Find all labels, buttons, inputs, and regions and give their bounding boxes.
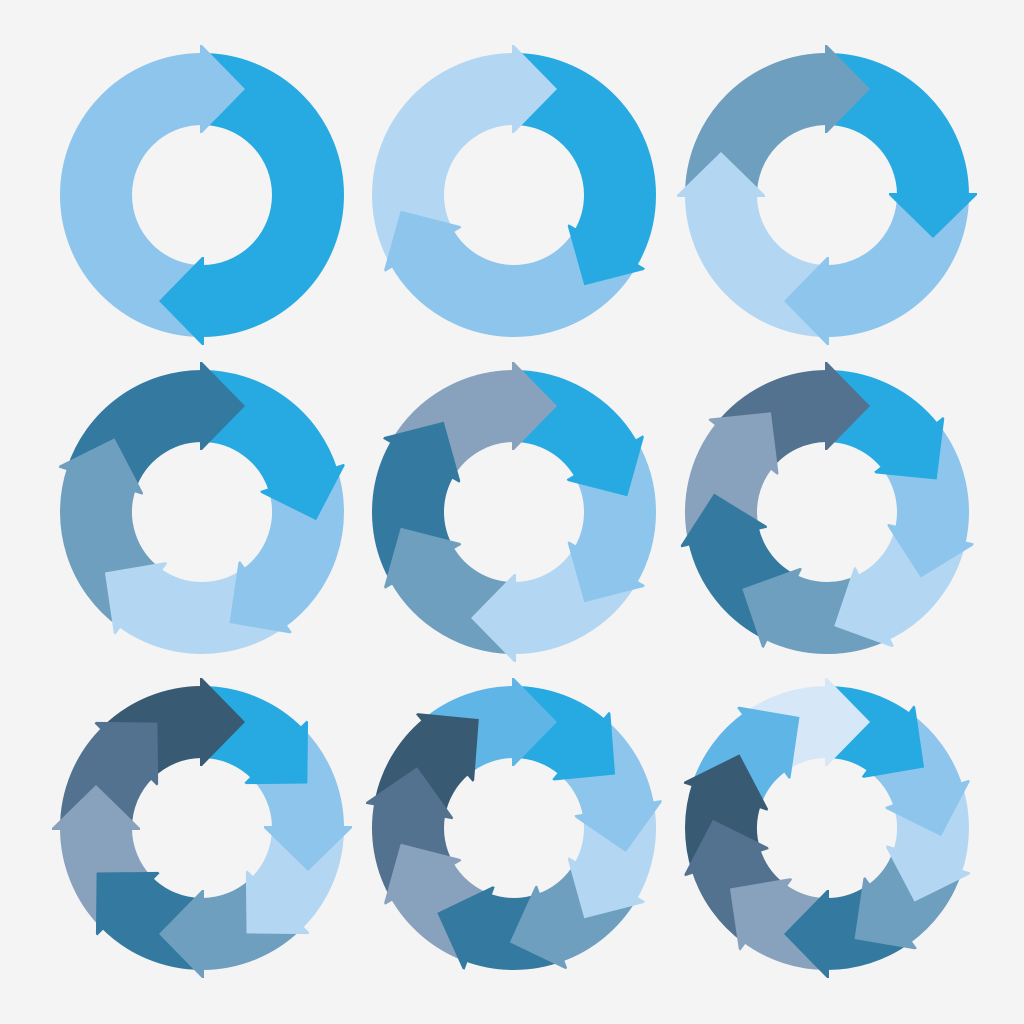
ring 3: four-segment cycle bbox=[677, 45, 977, 345]
ring 7: eight-segment cycle bbox=[52, 678, 352, 978]
ring 2: three-segment cycle bbox=[363, 45, 659, 340]
ring 5: six-segment cycle bbox=[363, 362, 665, 662]
ring 1: two-segment cycle bbox=[96, 45, 308, 345]
ring 8: nine-segment cycle bbox=[363, 678, 669, 984]
ring 4: five-segment cycle bbox=[54, 362, 358, 660]
ring 6: seven-segment cycle bbox=[671, 362, 976, 666]
ring 9: ten-segment cycle bbox=[671, 678, 983, 978]
